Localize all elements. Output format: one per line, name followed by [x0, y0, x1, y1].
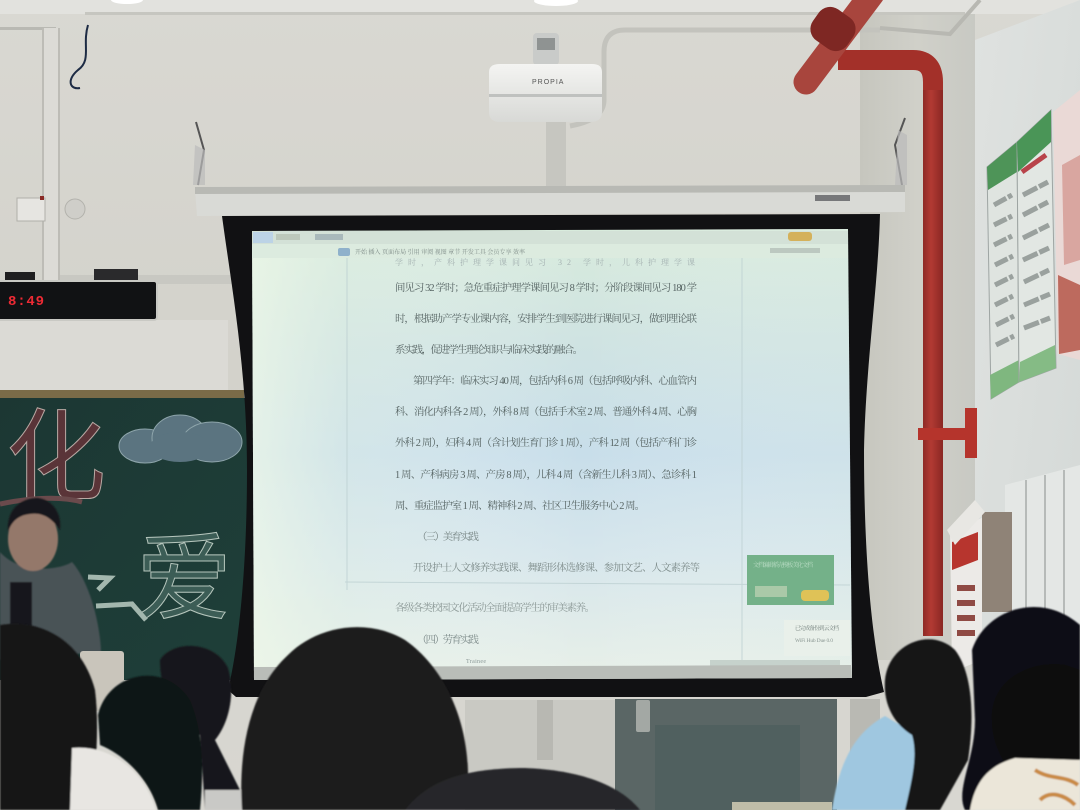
teacher hair — [8, 498, 60, 532]
student: front right hair — [992, 664, 1080, 772]
screen image — [252, 229, 852, 680]
lectern — [80, 651, 124, 711]
document body text: 外科 2 周），妇科 4 周（含计划生育门诊 1 周），产科 12 周（包括产科门诊 — [395, 436, 698, 449]
notification box: 已完成备份到云文档 — [795, 624, 839, 632]
chalk character: red: 化 — [6, 376, 106, 521]
student: left second head — [98, 676, 202, 810]
red fire pipe — [805, 0, 980, 636]
notification box — [784, 620, 850, 656]
student: far left — [0, 624, 97, 810]
window tab bar: 开始 插入 页面布局 引用 审阅 视图 章节 开发工具 会员专享 效率 — [355, 248, 525, 256]
document body text: 时，根据助产学专业课内容，安排学生到医院进行课间见习，做到理论联 — [395, 312, 698, 325]
student: left back head — [160, 646, 240, 810]
wall switch and sensor — [17, 196, 85, 221]
right wall posters — [987, 90, 1080, 399]
document body text: 间见习 32 学时；急危重症护理学课间见习 8 学时；分阶段课间见习 180 学 — [395, 281, 698, 294]
student: centre head — [241, 627, 468, 810]
chalk cloud — [119, 415, 242, 463]
wall clock display — [0, 269, 157, 320]
document page edges — [345, 258, 850, 660]
notification box: WiFi Hub Due 0.0 — [795, 638, 833, 644]
status bar: Trainee — [466, 659, 486, 665]
document body text: （四）劳育实践 — [417, 633, 480, 646]
screen casing — [193, 130, 907, 216]
green ad popup — [747, 555, 834, 605]
poster: left panel — [987, 142, 1019, 399]
document body text: 系实践，促进学生理论知识与临床实践的融合。 — [395, 343, 583, 356]
window tab bar — [252, 231, 848, 258]
student audience — [0, 624, 640, 810]
teacher — [0, 498, 101, 660]
student: floral shirt — [970, 758, 1080, 810]
ceiling lights — [111, 0, 578, 6]
wall wiring — [71, 25, 905, 185]
document body text: 各级各类校园文化活动全面提高学生的审美素养。 — [395, 601, 595, 614]
teacher body — [0, 552, 101, 660]
teacher head — [8, 507, 58, 571]
chalk character: partial stroke — [88, 577, 146, 620]
document body text: 开设护士人文修养实践课、舞蹈形体选修课、参加文艺、人文素养等 — [413, 561, 700, 574]
students at right — [832, 607, 1080, 810]
document body text: 周、重症监护室 1 周、精神科 2 周、社区卫生服务中心 2 周。 — [395, 499, 645, 512]
chalk character: love: 爱 — [136, 501, 232, 640]
fire safety notice board — [947, 500, 1012, 672]
document body text: 学时，产科护理学课间见习 32 学时，儿科护理学课 — [395, 257, 695, 268]
projector: PROPIA — [532, 79, 564, 86]
projector — [489, 33, 602, 188]
poster: middle panel — [1017, 110, 1056, 382]
door below screen — [465, 699, 880, 810]
document body text: （三）美育实践 — [417, 530, 480, 543]
wall clock display: 8:49 — [8, 294, 44, 310]
projected document — [252, 229, 852, 680]
status bar — [254, 659, 852, 680]
poster: pink panel — [1053, 90, 1080, 360]
blackboard — [0, 376, 248, 680]
chalk stroke under red character — [0, 498, 82, 504]
document body text — [395, 257, 700, 646]
student: ponytail hair — [885, 639, 972, 810]
student: bottom head — [405, 768, 640, 810]
conduit pipe — [570, 30, 880, 126]
document body text: 1 周、产科病房 3 周、产房 8 周），儿科 4 周（含新生儿科 3 周）、急诊科 1 — [395, 468, 697, 481]
document body text: 第四学年：临床实习 40 周，包括内科 6 周（包括呼吸内科、心血管内 — [413, 374, 697, 387]
wall panels and wall chart — [1005, 465, 1080, 640]
document body text: 科、消化内科各 2 周），外科 8 周（包括手术室 2 周、普通外科 4 周、心胸 — [395, 405, 698, 418]
right side wall — [975, 0, 1080, 810]
student: far right hair — [962, 607, 1080, 810]
student: blue shirt — [832, 716, 925, 810]
green ad popup: 文档编辑 稻壳模板 美化文档 — [753, 561, 813, 569]
projector screen black frame — [222, 214, 884, 697]
